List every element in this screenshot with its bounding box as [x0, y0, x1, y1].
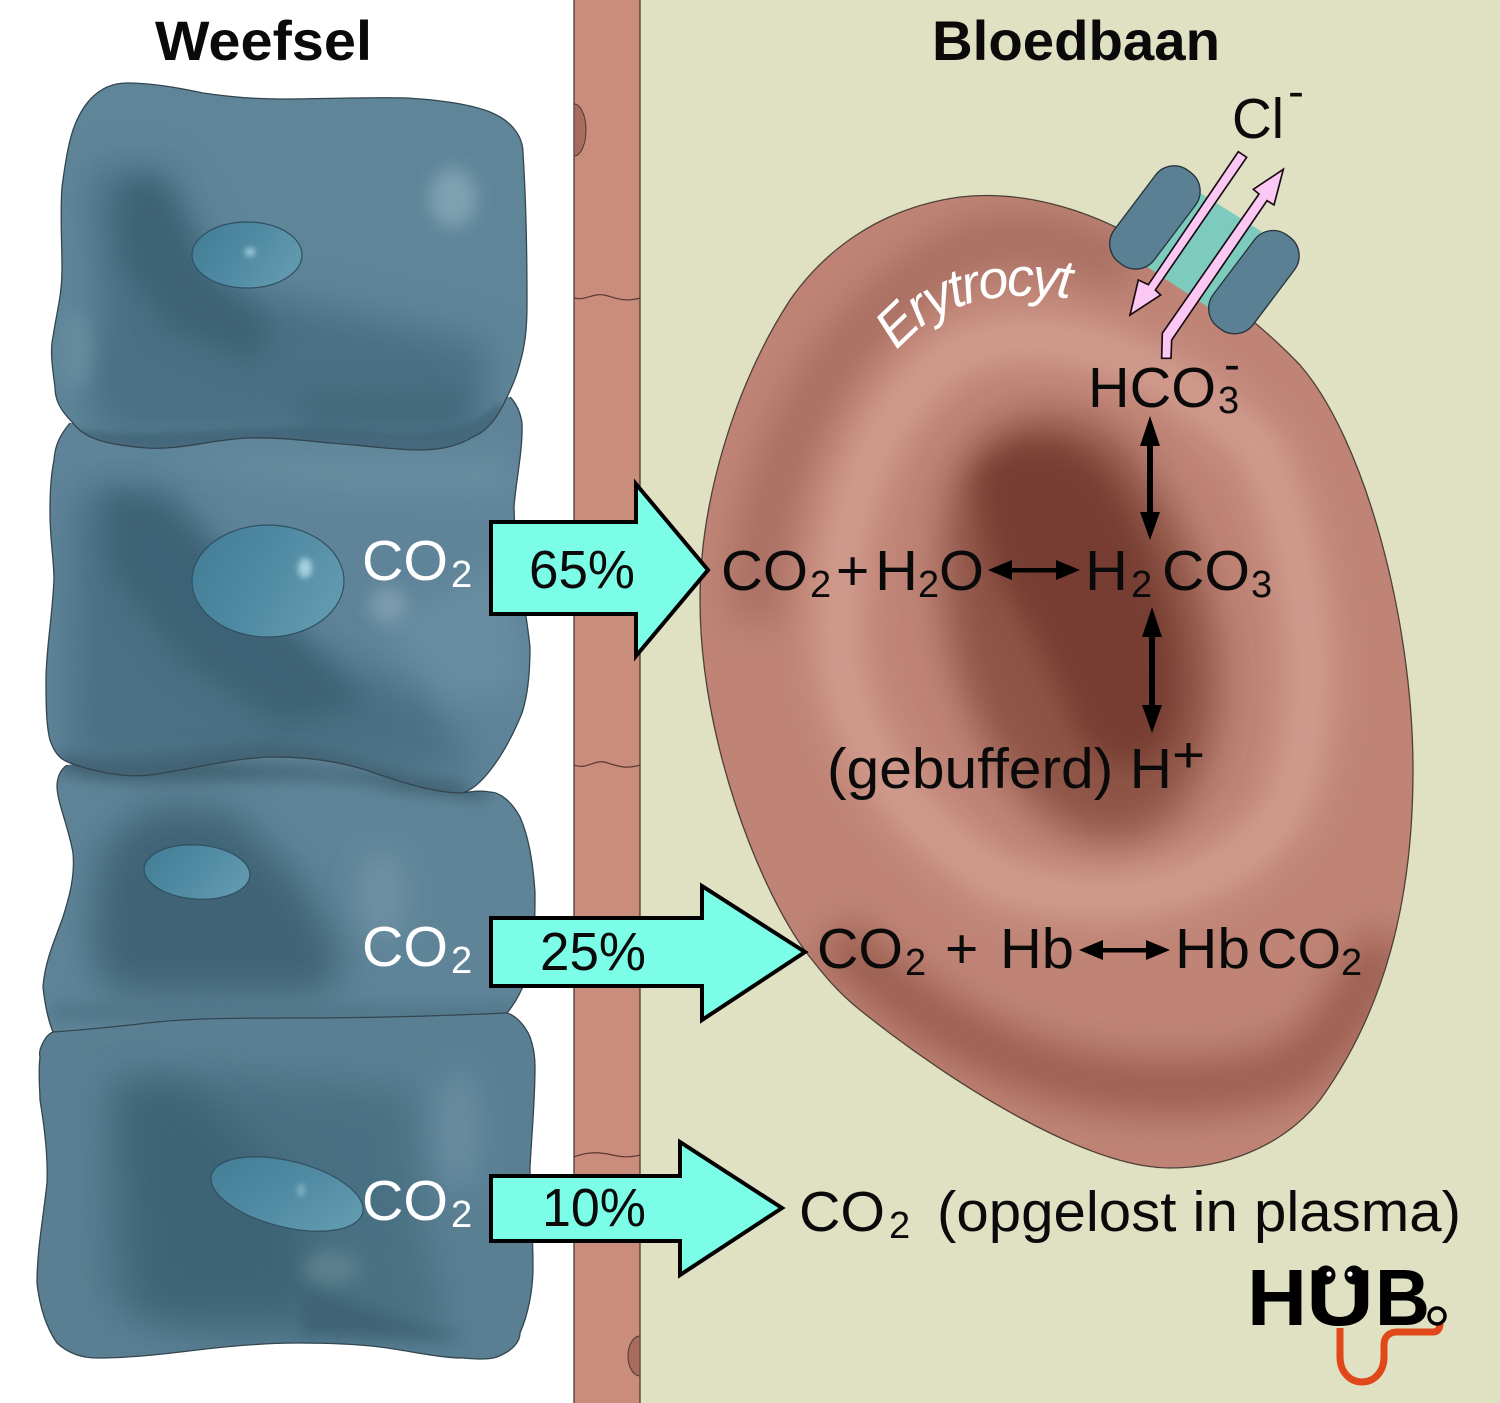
background: blood plasma: [640, 0, 1500, 1403]
nucleus of cell 2: [192, 525, 344, 637]
equation: CO2 + H2O to H2CO3: CO: [1162, 539, 1250, 603]
arrow: 25 percent: 25%: [540, 922, 646, 982]
equation: CO2 + H2O to H2CO3: +: [836, 539, 869, 603]
icon: chloride bicarbonate exchanger: [1100, 152, 1308, 358]
label: dissolved CO2: 2: [889, 1205, 910, 1247]
equation: CO2 + H2O to H2CO3: H: [1085, 539, 1128, 603]
arrow: Cl into cell: [1130, 152, 1247, 315]
label: CO2 from cell 2: 2: [451, 554, 472, 596]
arrow: H2CO3 to H+: [1142, 607, 1162, 733]
equation: CO2 + Hb to HbCO2: +: [945, 917, 978, 981]
equation: CO2 + H2O to H2CO3: 3: [1251, 564, 1272, 606]
arrow: 65 percent: 65%: [529, 540, 635, 600]
arrow: HCO3 out of cell: [1162, 169, 1283, 358]
arrow: 25 percent: [491, 886, 805, 1020]
dark centre halo: [943, 415, 1219, 839]
arrow: 10 percent: [491, 1142, 782, 1275]
logo: HUB stethoscope: U: [1306, 1253, 1374, 1342]
label: HCO3-: HCO: [1088, 356, 1216, 420]
nucleus of cell 3: [142, 841, 252, 903]
label: dissolved CO2: (opgelost in plasma): [937, 1180, 1461, 1244]
label: buffered H+: +: [1172, 727, 1205, 783]
panel: tissue cell 2: [46, 397, 530, 810]
panel: tissue cell 4: [37, 1013, 535, 1359]
equation: CO2 + H2O to H2CO3: [721, 539, 1272, 606]
dark lower band: [835, 935, 1385, 1088]
arrow: CO2+H2O to H2CO3: [988, 560, 1080, 580]
label: Cl-: [1232, 65, 1304, 151]
label: HCO3-: 3: [1218, 380, 1239, 422]
panel: tissue cell 3: [43, 740, 535, 1032]
vessel wall: [574, 0, 640, 1403]
equation: CO2 + Hb to HbCO2: 2: [905, 942, 926, 984]
arrow: HCO3 to H2CO3: [1140, 416, 1160, 540]
label: CO2 from cell 3: 2: [451, 940, 472, 982]
equation: CO2 + H2O to H2CO3: CO: [721, 539, 808, 603]
heading: Weefsel: Weefsel: [155, 9, 372, 72]
arrow: 10 percent: 10%: [542, 1178, 646, 1238]
label: CO2 from cell 4: 2: [451, 1194, 472, 1236]
nucleus of cell 4: [203, 1143, 371, 1245]
label: Erytrocyt: Erytrocyt: [877, 263, 1076, 349]
equation: CO2 + H2O to H2CO3: H: [875, 539, 918, 603]
equation: CO2 + Hb to HbCO2: CO: [817, 917, 903, 981]
lighter ring: [838, 337, 1309, 896]
label: buffered H+: (gebufferd) H: [827, 737, 1172, 801]
label: Cl-: -: [1288, 65, 1304, 117]
panel: tissue cell 1: [52, 83, 527, 460]
logo: HUB stethoscope: [1247, 1253, 1445, 1382]
label: CO2 from cell 4: CO: [362, 1169, 448, 1233]
nucleus of cell 1: [192, 222, 302, 288]
logo: HUB stethoscope: H: [1247, 1253, 1307, 1342]
logo: HUB stethoscope: B: [1375, 1253, 1430, 1342]
label: CO2 from cell 3: CO: [362, 915, 448, 979]
erythrocyte: [700, 195, 1413, 1168]
darkest centre: [975, 442, 1178, 766]
equation: CO2 + H2O to H2CO3: O: [939, 539, 984, 603]
top-left dark band: [755, 240, 1130, 620]
equation: CO2 + H2O to H2CO3: 2: [1131, 564, 1152, 606]
equation: CO2 + Hb to HbCO2: [817, 917, 1362, 984]
equation: CO2 + Hb to HbCO2: CO: [1257, 917, 1341, 981]
label: Cl-: Cl: [1232, 87, 1284, 151]
arrow: CO2+Hb to HbCO2: [1079, 940, 1170, 960]
label: dissolved CO2: CO: [799, 1180, 885, 1244]
equation: CO2 + Hb to HbCO2: 2: [1341, 942, 1362, 984]
label: HCO3-: -: [1224, 338, 1240, 390]
label: CO2 from cell 2: CO: [362, 529, 448, 593]
equation: CO2 + H2O to H2CO3: 2: [918, 564, 939, 606]
background: white tissue side: [0, 0, 574, 1403]
equation: CO2 + Hb to HbCO2: Hb: [1175, 917, 1250, 981]
label: HCO3-: [1088, 338, 1240, 422]
heading: Bloedbaan: Bloedbaan: [932, 9, 1220, 72]
equation: CO2 + H2O to H2CO3: 2: [810, 564, 831, 606]
arrow: 65 percent: [491, 484, 708, 656]
equation: CO2 + Hb to HbCO2: Hb: [1000, 917, 1074, 981]
